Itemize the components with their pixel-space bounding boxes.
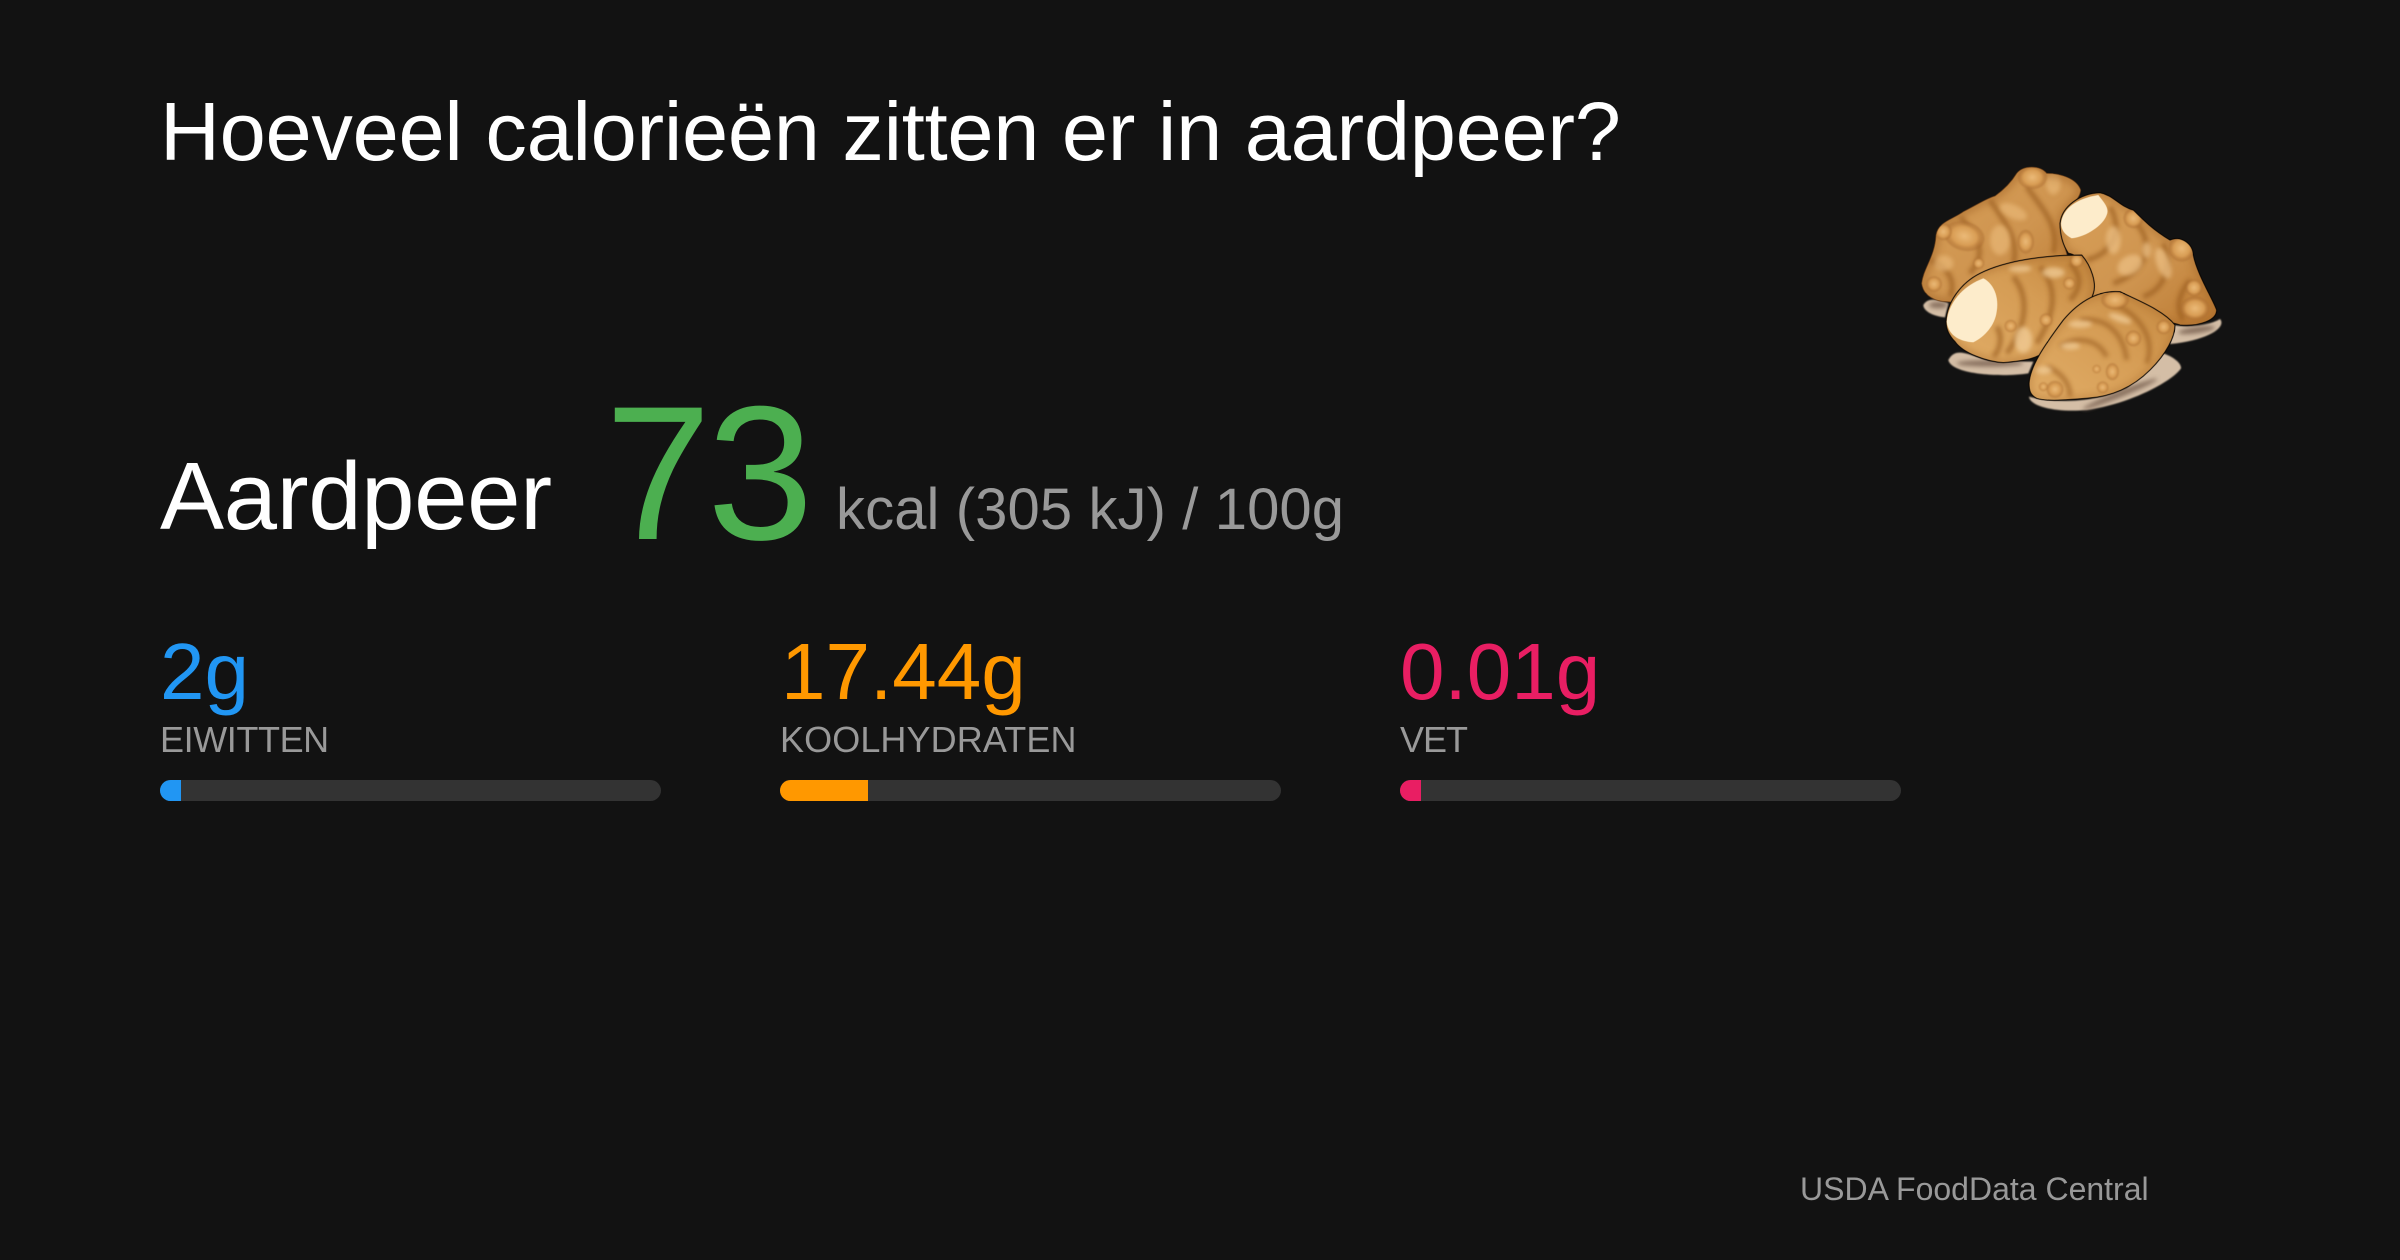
progress bar: carbohydrates — [780, 780, 1281, 801]
calorie unit: kcal (305 kJ) / 100g — [836, 477, 1344, 542]
stat value: fat: 0.01g — [1400, 627, 1600, 716]
source: USDA FoodData Central — [1800, 1171, 2149, 1207]
title: Hoeveel calorieën zitten er in aardpeer? — [160, 85, 1621, 178]
icon: Jerusalem artichoke tubers — [1921, 166, 2222, 412]
tuber: front right — [2027, 290, 2177, 403]
cut face — [2061, 195, 2108, 238]
stat value: protein: 2g — [160, 627, 249, 716]
tuber: front left — [1943, 253, 2100, 367]
progress bar: protein — [160, 780, 661, 801]
shadows — [1923, 300, 2221, 412]
tuber: back right — [2057, 190, 2220, 330]
stat label: protein: EIWITTEN — [160, 719, 329, 760]
stat value: carbohydrates: 17.44g — [781, 627, 1026, 716]
tuber: back left — [1921, 166, 2082, 302]
stat label: fat: VET — [1400, 719, 1467, 760]
food name: Aardpeer — [160, 443, 552, 550]
progress bar: fat — [1400, 780, 1901, 801]
calorie number: 73 — [605, 367, 809, 580]
stat label: carbohydrates: KOOLHYDRATEN — [780, 719, 1077, 760]
cut face — [1947, 278, 1997, 342]
